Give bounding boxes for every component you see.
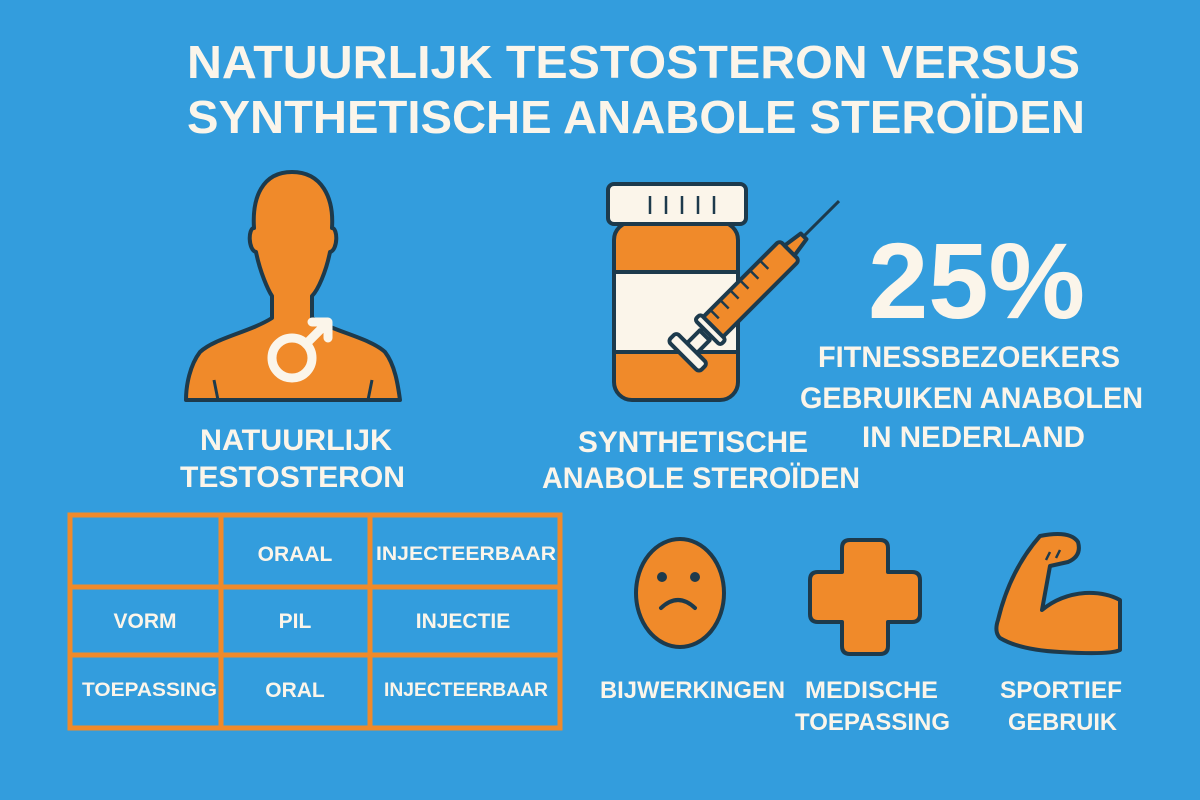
icon: man silhouette xyxy=(186,172,400,400)
icon: sad face xyxy=(636,539,724,647)
comparison table: TOEPASSING xyxy=(82,680,217,701)
comparison table: PIL xyxy=(279,610,312,633)
comparison table: INJECTEERBAAR xyxy=(376,544,556,565)
icon: medical cross xyxy=(810,540,920,654)
label: natuurlijk testosteron: NATUURLIJK xyxy=(200,424,392,457)
title xyxy=(187,36,1085,143)
icon: flexed arm xyxy=(996,534,1120,653)
label: medische toepassing xyxy=(795,677,950,736)
label: bijwerkingen: BIJWERKINGEN xyxy=(600,677,785,704)
stat: 25 percent: IN NEDERLAND xyxy=(862,421,1085,454)
comparison table: INJECTEERBAAR xyxy=(384,680,548,701)
comparison table: VORM xyxy=(114,610,176,633)
icon: male symbol xyxy=(272,322,328,378)
label: synthetische anabole steroiden xyxy=(542,426,860,495)
stat: 25 percent xyxy=(800,220,1143,454)
label: synthetische anabole steroiden: ANABOLE STEROÏDEN xyxy=(542,462,860,495)
label: medische toepassing: MEDISCHE xyxy=(805,677,938,704)
icon: pill jar with syringe xyxy=(608,184,855,400)
label: natuurlijk testosteron: TESTOSTERON xyxy=(180,461,405,494)
stat: 25 percent: FITNESSBEZOEKERS xyxy=(818,341,1120,374)
title: NATUURLIJK TESTOSTERON VERSUS xyxy=(187,36,1080,88)
comparison table: ORAL xyxy=(265,679,325,702)
label: sportief gebruik: SPORTIEF xyxy=(1000,677,1122,704)
label: medische toepassing: TOEPASSING xyxy=(795,709,950,736)
stat: 25 percent: GEBRUIKEN ANABOLEN xyxy=(800,382,1143,415)
comparison table: ORAAL xyxy=(258,543,332,566)
comparison table xyxy=(70,515,560,728)
label: sportief gebruik xyxy=(1000,677,1122,736)
label: synthetische anabole steroiden: SYNTHETISCHE xyxy=(578,426,808,459)
comparison table: INJECTIE xyxy=(416,610,510,633)
label: natuurlijk testosteron xyxy=(180,424,405,494)
stat: 25 percent: 25% xyxy=(868,220,1085,341)
label: sportief gebruik: GEBRUIK xyxy=(1008,709,1118,736)
title: SYNTHETISCHE ANABOLE STEROÏDEN xyxy=(187,91,1085,143)
